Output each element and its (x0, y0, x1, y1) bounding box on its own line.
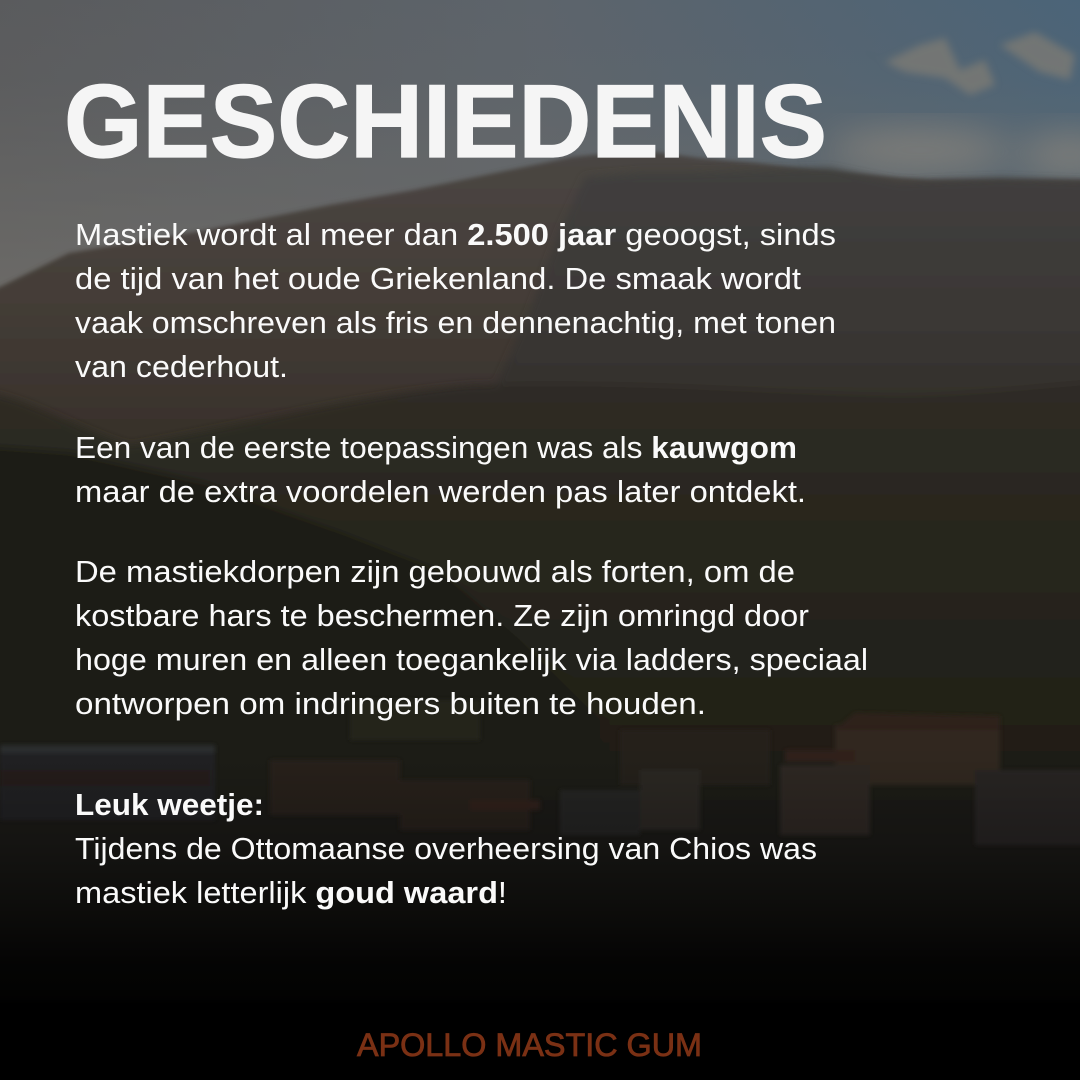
paragraph: fortified villages: kostbare hars te beschermen. Ze zijn omringd door (75, 598, 809, 633)
paragraph: chewing gum: maar de extra voordelen werden pas later ontdekt. (75, 474, 806, 509)
paragraph: chewing gum: Een van de eerste toepassingen was als kauwgom (75, 430, 797, 465)
paragraph: 2500 years: vaak omschreven als fris en dennenachtig, met tonen (75, 305, 836, 340)
fun fact: Leuk weetje: (75, 787, 264, 822)
paragraph: 2500 years: Mastiek wordt al meer dan 2.500 jaar geoogst, sinds (75, 217, 836, 252)
fun fact: Tijdens de Ottomaanse overheersing van Chios was (75, 831, 817, 866)
footer brand: APOLLO MASTIC GUM (357, 1027, 702, 1063)
paragraph: fortified villages: ontworpen om indringers buiten te houden. (75, 686, 706, 721)
paragraph: fortified villages (75, 554, 868, 721)
paragraph: 2500 years (75, 217, 836, 384)
paragraph: 2500 years: de tijd van het oude Griekenland. De smaak wordt (75, 261, 801, 296)
fun fact (75, 787, 817, 910)
village buildings (0, 700, 1080, 845)
paragraph: fortified villages: De mastiekdorpen zijn gebouwd als forten, om de (75, 554, 795, 589)
paragraph: chewing gum (75, 430, 806, 509)
fun fact: mastiek letterlijk goud waard ! (75, 875, 507, 910)
paragraph: 2500 years: van cederhout. (75, 349, 288, 384)
paragraph: fortified villages: hoge muren en alleen toegankelijk via ladders, speciaal (75, 642, 868, 677)
title: GESCHIEDENIS (64, 64, 827, 180)
